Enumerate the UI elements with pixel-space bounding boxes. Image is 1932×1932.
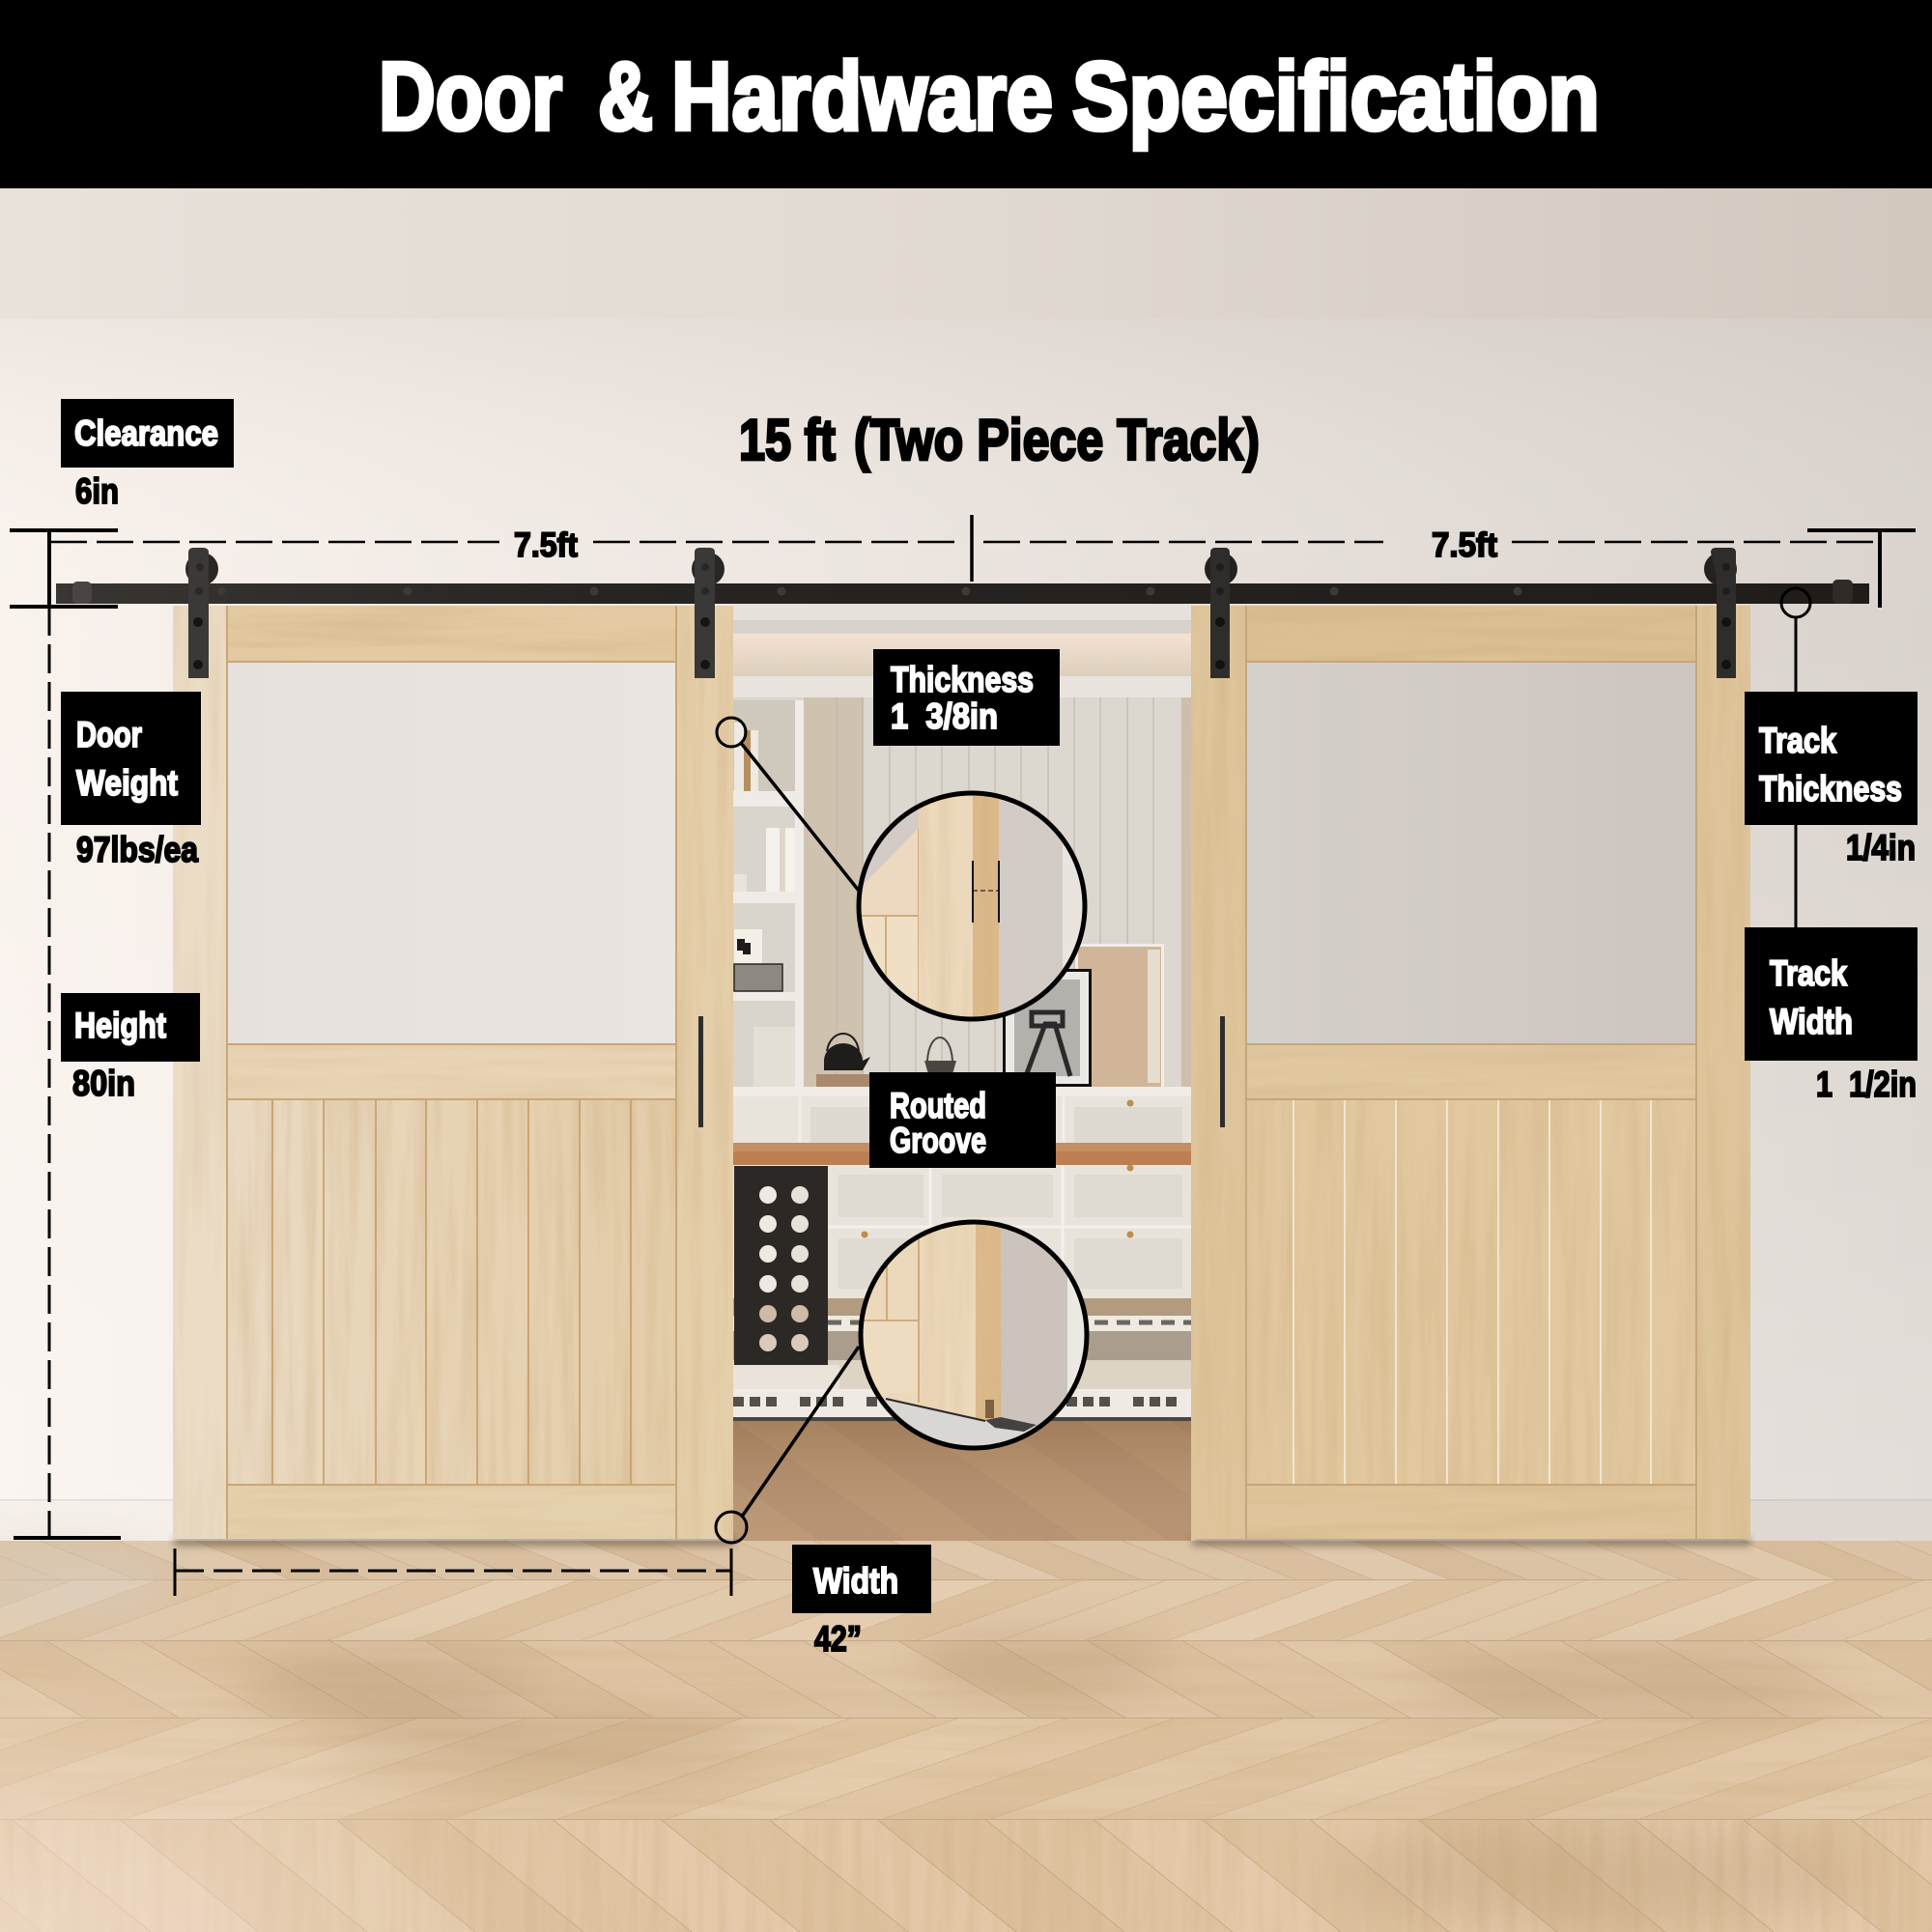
label: thickness: Thickness xyxy=(891,660,1034,699)
wainscot wall xyxy=(804,697,1191,1087)
track dimension: left half with 7.5ft: 7.5ft xyxy=(514,526,578,564)
label: clearance: 6in xyxy=(75,471,119,511)
bookshelf xyxy=(733,700,804,1087)
right door xyxy=(1191,606,1750,1539)
hanger 3 xyxy=(1205,548,1237,678)
hanger 1 xyxy=(185,548,218,678)
left door rails xyxy=(227,606,676,1539)
left door outer stile xyxy=(173,606,227,1539)
track dimension: right half with 7.5ft: 7.5ft xyxy=(1432,526,1497,564)
label: track thickness: Track xyxy=(1759,721,1836,760)
label: clearance: Clearance xyxy=(74,413,218,453)
heading: total track length: (Two Piece Track) xyxy=(854,408,1260,472)
label: routed groove: Groove xyxy=(890,1121,986,1160)
label: track thickness xyxy=(1745,692,1918,867)
callout marker: routed groove xyxy=(716,1512,747,1543)
callout line: thickness xyxy=(741,743,859,891)
wall background xyxy=(0,319,1932,1546)
black perforated unit xyxy=(734,1166,828,1365)
label: height xyxy=(61,993,200,1103)
detail circle: routed groove xyxy=(855,1217,1096,1454)
label: routed groove: Routed xyxy=(890,1086,986,1125)
art and kettles xyxy=(816,944,1164,1087)
left door glass panel xyxy=(227,662,676,1044)
label: thickness: 1 3/8in xyxy=(891,696,998,736)
label: door weight xyxy=(61,692,201,869)
label: width: 42” xyxy=(814,1619,862,1659)
callout line: routed groove xyxy=(742,1347,859,1517)
detail circle: door thickness xyxy=(850,787,1087,1024)
door width dimension xyxy=(175,1548,731,1596)
label: width: Width xyxy=(813,1561,898,1601)
hanger 2 xyxy=(692,548,724,678)
callout marker: thickness xyxy=(717,718,746,747)
label: track width xyxy=(1745,927,1918,1104)
header bar with title: Door xyxy=(379,43,562,151)
label: door weight: 97lbs/ea xyxy=(76,830,198,869)
heading: total track length: 15 ft xyxy=(739,408,836,472)
rear floor and rug xyxy=(733,1298,1191,1541)
label: track width: Track xyxy=(1770,953,1847,993)
label: door weight: Door xyxy=(76,715,142,754)
header bar with title xyxy=(0,0,1932,188)
left door handle xyxy=(698,1016,703,1127)
shadows under doors xyxy=(174,1538,1750,1546)
header bar with title: & xyxy=(598,43,653,151)
label: height: Height xyxy=(74,1006,166,1045)
interior room seen through opening xyxy=(733,604,1191,1541)
hanger 4 xyxy=(1704,548,1737,678)
callout marker: track xyxy=(1781,588,1810,617)
label: track thickness: 1/4in xyxy=(1846,828,1916,867)
callout line: track xyxy=(1795,618,1797,927)
header bar with title: Hardware xyxy=(671,43,1053,151)
roller hangers xyxy=(185,548,1737,678)
label: routed groove xyxy=(869,1072,1056,1168)
label: track width: Width xyxy=(1770,1002,1853,1041)
clearance bracket left xyxy=(10,530,118,607)
right door planks xyxy=(1246,1099,1696,1485)
track stoppers xyxy=(72,580,1853,604)
left door xyxy=(173,606,733,1539)
label: track thickness: Thickness xyxy=(1759,769,1902,809)
label: width xyxy=(792,1545,931,1659)
left door planks xyxy=(227,1099,676,1485)
label: door weight: Weight xyxy=(76,763,178,803)
sliding track xyxy=(56,580,1869,604)
header bar with title: Specification xyxy=(1072,43,1600,151)
bracket right xyxy=(1807,530,1916,608)
label: clearance xyxy=(61,399,234,511)
right door rails xyxy=(1246,606,1696,1539)
height dimension line xyxy=(14,607,121,1538)
label: height: 80in xyxy=(72,1064,135,1103)
cabinets and counter xyxy=(733,1087,1191,1298)
track centre tick xyxy=(970,515,974,582)
right door handle xyxy=(1220,1016,1225,1127)
floor: herringbone planks xyxy=(0,1541,1932,1932)
right door glass panel xyxy=(1246,662,1696,1044)
ceiling band xyxy=(0,188,1932,319)
label: thickness xyxy=(873,649,1060,746)
